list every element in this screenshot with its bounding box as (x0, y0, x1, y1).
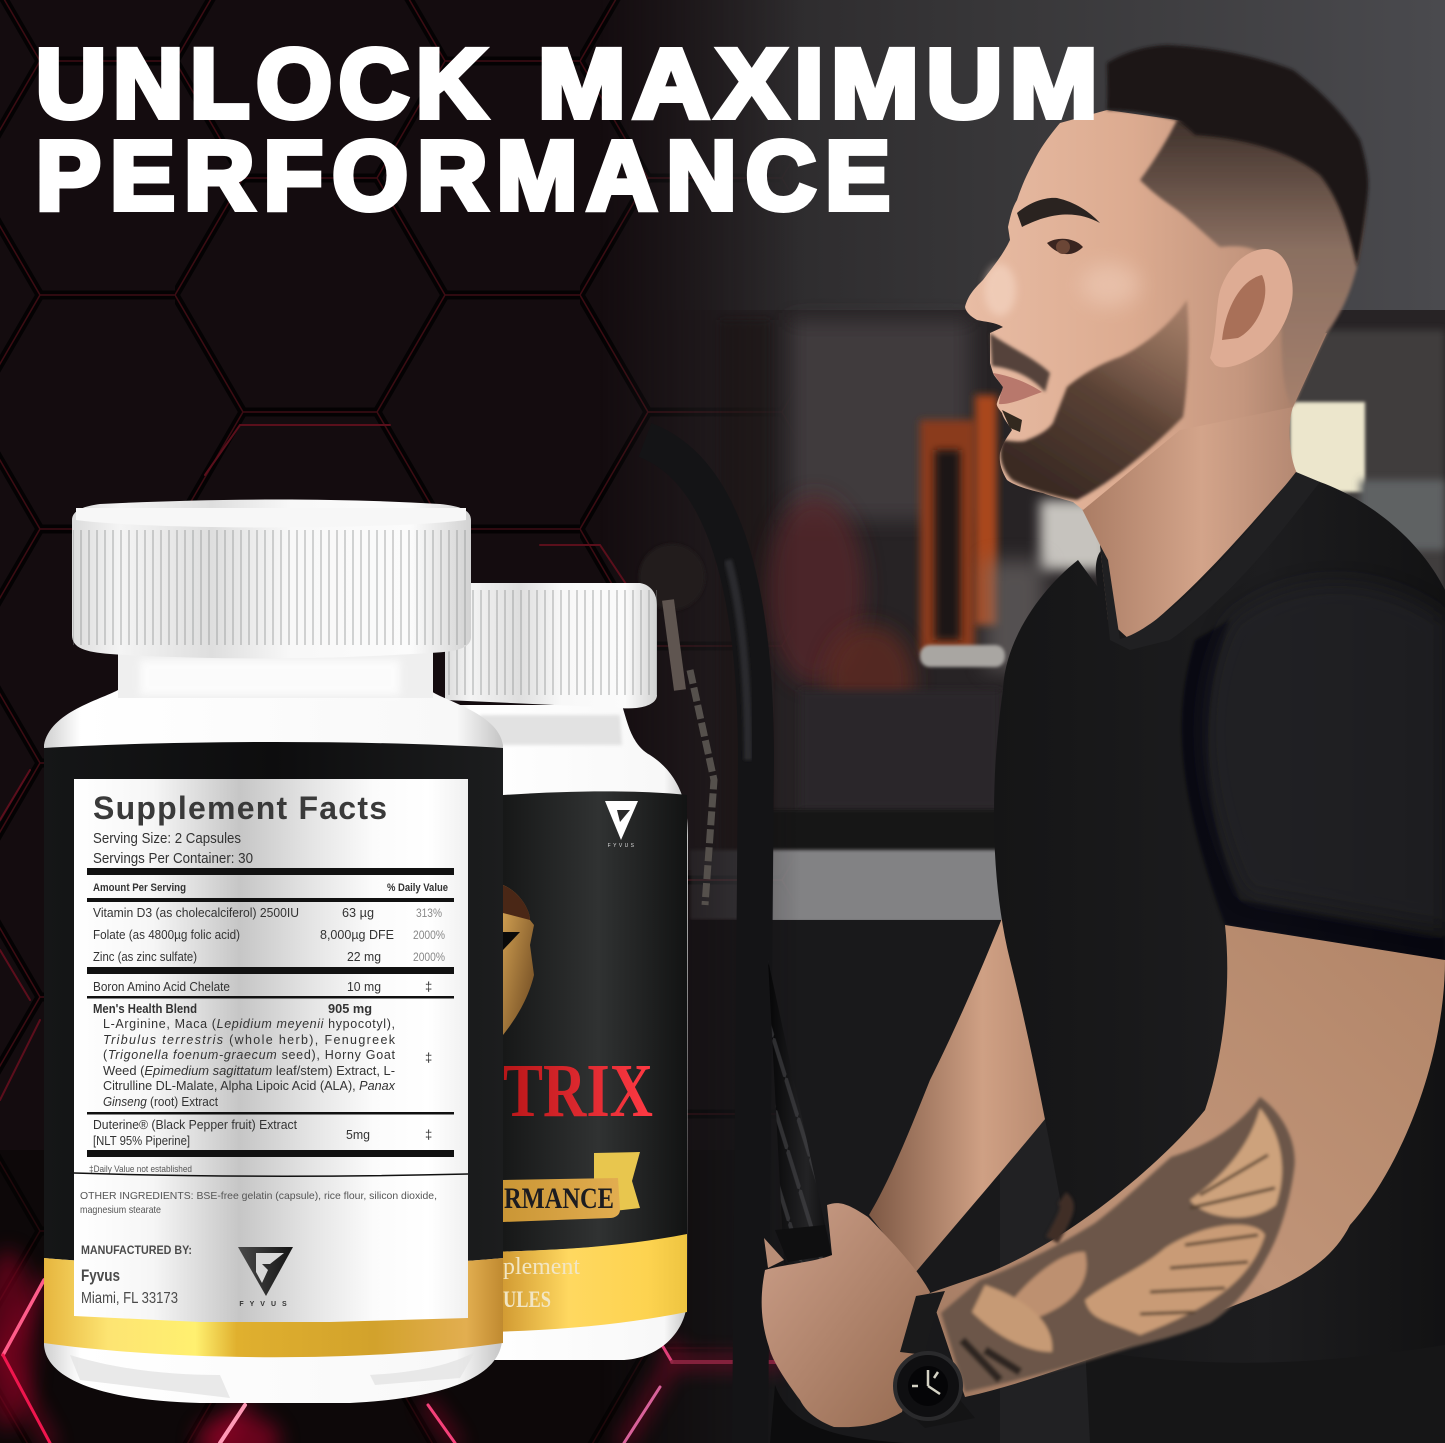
nutrient rows: 22 mg (347, 949, 381, 964)
nutrient rows: 2000% (413, 950, 445, 964)
shirt torso (994, 472, 1445, 1363)
ear (1210, 249, 1293, 367)
lips (993, 373, 1042, 404)
boron row: ‡ (425, 979, 432, 994)
gold band (44, 1258, 503, 1357)
nutrient rows: 2000% (413, 928, 445, 942)
nutrient rows: 63 µg (342, 905, 374, 920)
blend block: 905 mg (328, 1002, 372, 1016)
background: gym scene (560, 0, 1445, 1443)
duterine row: 5mg (346, 1127, 370, 1142)
beard (1000, 300, 1188, 500)
table header: Amount Per Serving (93, 882, 186, 894)
capsule count: ULES (503, 1287, 551, 1312)
moustache (990, 333, 1050, 392)
fyvus logo: FYVUS (239, 1301, 293, 1308)
brand logo small (605, 801, 638, 849)
manufacturer: MANUFACTURED BY: (81, 1243, 192, 1257)
footnote: ‡Daily Value not established (89, 1164, 192, 1175)
nutrient rows: 8,000µg DFE (320, 927, 394, 942)
duterine row: Duterine® (Black Pepper fruit) Extract (93, 1117, 297, 1132)
cable with rope (639, 440, 905, 1443)
performance ribbon: RMANCE (504, 1182, 614, 1215)
back bottle (445, 583, 688, 1360)
title (36, 29, 1105, 230)
other ingredients (80, 1190, 437, 1216)
cap (445, 583, 657, 708)
product subtitle: plement (503, 1254, 580, 1280)
blend block: Tribulus terrestris (whole herb), Fenugreek (103, 1033, 396, 1047)
blend block: Ginseng (root) Extract (103, 1095, 218, 1109)
boron row: Boron Amino Acid Chelate (93, 979, 230, 994)
duterine row: ‡ (425, 1127, 432, 1142)
tattoo (941, 1097, 1295, 1392)
collar (1110, 472, 1320, 650)
brand logo small: FYVUS (608, 843, 636, 849)
title: MAXIMUM (538, 29, 1105, 138)
nutrient rows: Folate (as 4800µg folic acid) (93, 927, 240, 942)
heading: Supplement Facts (93, 790, 387, 826)
black label band (44, 742, 503, 1267)
blend block: Weed (Epimedium sagittatum leaf/stem) Extract, L- (103, 1064, 395, 1078)
bottom highlight (70, 1352, 475, 1398)
duterine row: [NLT 95% Piperine] (93, 1133, 190, 1148)
title: UNLOCK (36, 29, 486, 138)
serving info: Serving Size: 2 Capsules (93, 831, 241, 847)
nutrient rows: Zinc (as zinc sulfate) (93, 949, 197, 964)
table header (93, 882, 448, 894)
boron row (93, 979, 432, 994)
duterine row (93, 1117, 432, 1148)
title: PERFORMANCE (36, 121, 890, 230)
man (762, 45, 1445, 1443)
table header: % Daily Value (387, 882, 448, 894)
cap (72, 500, 471, 658)
hand (762, 1203, 930, 1427)
mask emblem (503, 885, 534, 1035)
blend block (93, 1002, 432, 1109)
performance ribbon (503, 1152, 640, 1222)
blend block: Men's Health Blend (93, 1002, 197, 1016)
front bottle (44, 500, 503, 1403)
manufacturer: Fyvus (81, 1267, 120, 1285)
neck (1075, 333, 1327, 640)
blend block: ‡ (425, 1050, 432, 1065)
manufacturer: Miami, FL 33173 (81, 1290, 178, 1307)
nutrient rows (93, 905, 445, 964)
eyebrow and eye (1017, 198, 1100, 227)
neon hex lines (0, 425, 780, 1443)
nutrient rows: 313% (416, 906, 442, 920)
boron row: 10 mg (347, 979, 381, 994)
nutrient rows: Vitamin D3 (as cholecalciferol) 2500IU (93, 905, 299, 920)
other ingredients: magnesium stearate (80, 1204, 161, 1216)
supplement facts panel (74, 779, 468, 1322)
head (965, 110, 1335, 510)
fyvus logo (238, 1247, 293, 1308)
product name: TRIX (503, 1049, 653, 1133)
back arm (869, 868, 1075, 1273)
pants (1085, 1320, 1445, 1443)
blend block: (Trigonella foenum-graecum seed), Horny Goat (103, 1048, 396, 1062)
hair top (1107, 45, 1368, 267)
watch (895, 1291, 975, 1428)
other ingredients: OTHER INGREDIENTS: BSE-free gelatin (capsule), rice flour, silicon dioxide, (80, 1190, 437, 1202)
manufacturer (81, 1243, 192, 1307)
serving info: Servings Per Container: 30 (93, 851, 253, 867)
blend block: Citrulline DL-Malate, Alpha Lipoic Acid (ALA), Panax (103, 1079, 396, 1093)
blend block: L-Arginine, Maca (Lepidium meyenii hypocotyl), (103, 1017, 395, 1031)
hair fade (1140, 120, 1365, 407)
serving info (93, 831, 253, 867)
front arm (930, 925, 1445, 1397)
